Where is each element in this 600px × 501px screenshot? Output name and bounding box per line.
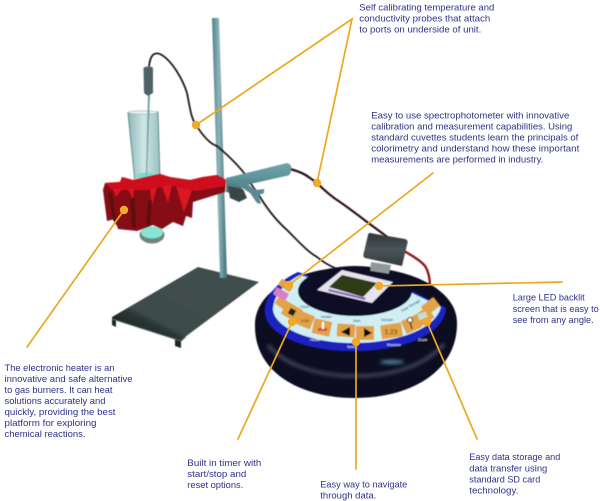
- spectrophotometer unit: Data Storage: [400, 299, 421, 313]
- temperature probe cable: [149, 53, 335, 268]
- text: heater: solutions accurately and: [4, 396, 106, 407]
- ring captions: Heater: [310, 338, 322, 342]
- sensor dongle: [363, 233, 408, 274]
- spectrophotometer unit: [255, 266, 457, 398]
- text: screen: [513, 293, 599, 326]
- button captions: Clock: [300, 305, 309, 309]
- screen display: [329, 275, 377, 297]
- light cyan ring: [273, 275, 441, 343]
- control buttons: [274, 279, 440, 340]
- text: heater: innovative and safe alternative: [4, 374, 132, 385]
- text: heater: platform for exploring: [4, 418, 97, 429]
- clamp and probe handle: [226, 163, 291, 204]
- text: storage: [469, 452, 560, 496]
- text: timer: start/stop and: [187, 469, 246, 480]
- text: spectrophotometer: colorimetry and understand how these important: [371, 144, 580, 155]
- text: spectrophotometer: [371, 110, 580, 166]
- red cable end: [404, 251, 430, 288]
- conductivity probe cable: [290, 169, 387, 237]
- spectrophotometer unit: Start: [353, 319, 361, 323]
- screen frame: [317, 270, 393, 303]
- text: heater: [4, 363, 132, 440]
- text: heater: to gas burners. It can heat: [4, 385, 113, 396]
- text: storage: standard SD card: [469, 474, 540, 485]
- pink button: [273, 287, 289, 301]
- text: probes: [359, 3, 494, 36]
- spectrophotometer unit: Zoom: [418, 338, 427, 342]
- spectrophotometer unit: Select: [347, 345, 357, 349]
- text: screen: screen that is easy to: [513, 304, 599, 315]
- text: navigation: [320, 480, 407, 501]
- spectrophotometer unit: Sample: [381, 318, 393, 322]
- leader: timer: [238, 322, 292, 439]
- text: heater: quickly, providing the best: [4, 407, 116, 418]
- leader: spectrophotometer: [289, 173, 433, 285]
- dark housing: [255, 267, 457, 398]
- text: heater: The electronic heater is an: [4, 363, 114, 374]
- beaker with probe: [128, 66, 160, 184]
- text: probes: to ports on underside of unit.: [359, 25, 481, 36]
- text: timer: [187, 458, 261, 491]
- spectrophotometer unit: 2:20: [301, 318, 310, 323]
- blue ring: [265, 272, 446, 351]
- text: screen: Large LED backlit: [513, 293, 585, 304]
- text: timer: Built in timer with: [187, 458, 261, 469]
- text: storage: Easy data storage and: [469, 452, 560, 463]
- text: storage: technology.: [469, 485, 518, 496]
- button glyphs: [341, 327, 350, 336]
- liquid bulb under heater: [140, 226, 164, 244]
- text: storage: data transfer using: [469, 463, 547, 474]
- text: spectrophotometer: standard cuvettes students learn the principals of: [371, 132, 579, 143]
- text: spectrophotometer: Easy to use spectrophotometer with innovative: [371, 110, 569, 121]
- spectrophotometer unit: Measure: [387, 343, 401, 347]
- spectrophotometer unit: 1.23: [385, 329, 398, 336]
- leader: storage: [427, 322, 477, 439]
- housing highlight: [380, 360, 404, 364]
- top dark dome: [298, 266, 412, 316]
- leader: navigate: [355, 342, 357, 469]
- text: spectrophotometer: measurements are performed in industry.: [371, 155, 543, 166]
- spectrophotometer unit: Heater: [321, 315, 333, 319]
- electronic heater: [103, 174, 226, 231]
- text: spectrophotometer: calibration and measurement capabilities. Using: [371, 121, 572, 132]
- base plate of the stand: [112, 267, 259, 348]
- text: navigation: Easy way to navigate: [320, 480, 407, 491]
- screen strip: [328, 289, 366, 300]
- probe body: [144, 66, 153, 96]
- text: screen: see from any angle.: [513, 315, 594, 326]
- leader dots: [120, 121, 431, 346]
- leader: heater: [27, 210, 124, 347]
- text: heater: chemical reactions.: [4, 429, 86, 440]
- text: probes: conductivity probes that attach: [359, 14, 490, 25]
- retort stand rod: [212, 18, 227, 278]
- leader: screen: [379, 282, 562, 286]
- housing rim highlight: [268, 344, 444, 376]
- leader: probes: [196, 19, 352, 183]
- text: timer: reset options.: [187, 480, 243, 491]
- text: probes: Self calibrating temperature and: [359, 3, 494, 14]
